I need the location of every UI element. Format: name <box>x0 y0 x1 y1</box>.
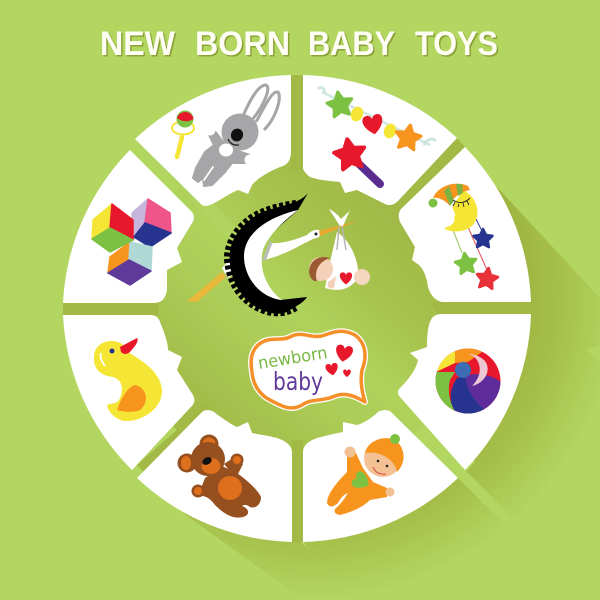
title <box>100 25 500 64</box>
icon: rattle <box>172 110 194 157</box>
panel: baby <box>303 410 458 542</box>
icon: teddy bear <box>178 434 261 518</box>
panel: rattle and bunny <box>135 75 291 206</box>
icon: bead toy <box>318 88 436 151</box>
title: NEW <box>102 26 177 64</box>
icon: bunny <box>193 85 279 186</box>
text: baby: baby <box>273 367 323 396</box>
icon: stork carrying baby <box>187 193 370 314</box>
panel: beads and star rattle <box>303 75 457 205</box>
title: BABY <box>310 26 397 64</box>
icon: swaddled baby <box>309 209 370 290</box>
title: BABY <box>308 25 395 63</box>
icon: stacked blocks <box>92 199 171 285</box>
long shadows <box>183 187 600 600</box>
icon: rubber duck <box>94 338 162 421</box>
icon: star rattle <box>332 137 380 184</box>
panel: ball <box>398 314 531 470</box>
title: NEW <box>100 25 176 63</box>
icon: hearts <box>325 344 354 377</box>
panel: blocks <box>63 150 194 303</box>
panel: teddy bear <box>137 410 292 542</box>
title: TOYS <box>415 25 498 63</box>
icon: baby in suit <box>327 434 404 515</box>
callout: newborn baby speech bubble <box>251 331 365 408</box>
icon: moon mobile <box>428 184 499 289</box>
center shaded area <box>63 75 531 542</box>
text: newborn: newborn <box>257 343 329 374</box>
title: TOYS <box>416 26 500 64</box>
title: BORN <box>195 25 290 63</box>
panel: moon mobile <box>399 147 531 302</box>
title: BORN <box>196 26 292 64</box>
icon: ball <box>436 348 500 414</box>
panel: duck <box>63 315 194 470</box>
